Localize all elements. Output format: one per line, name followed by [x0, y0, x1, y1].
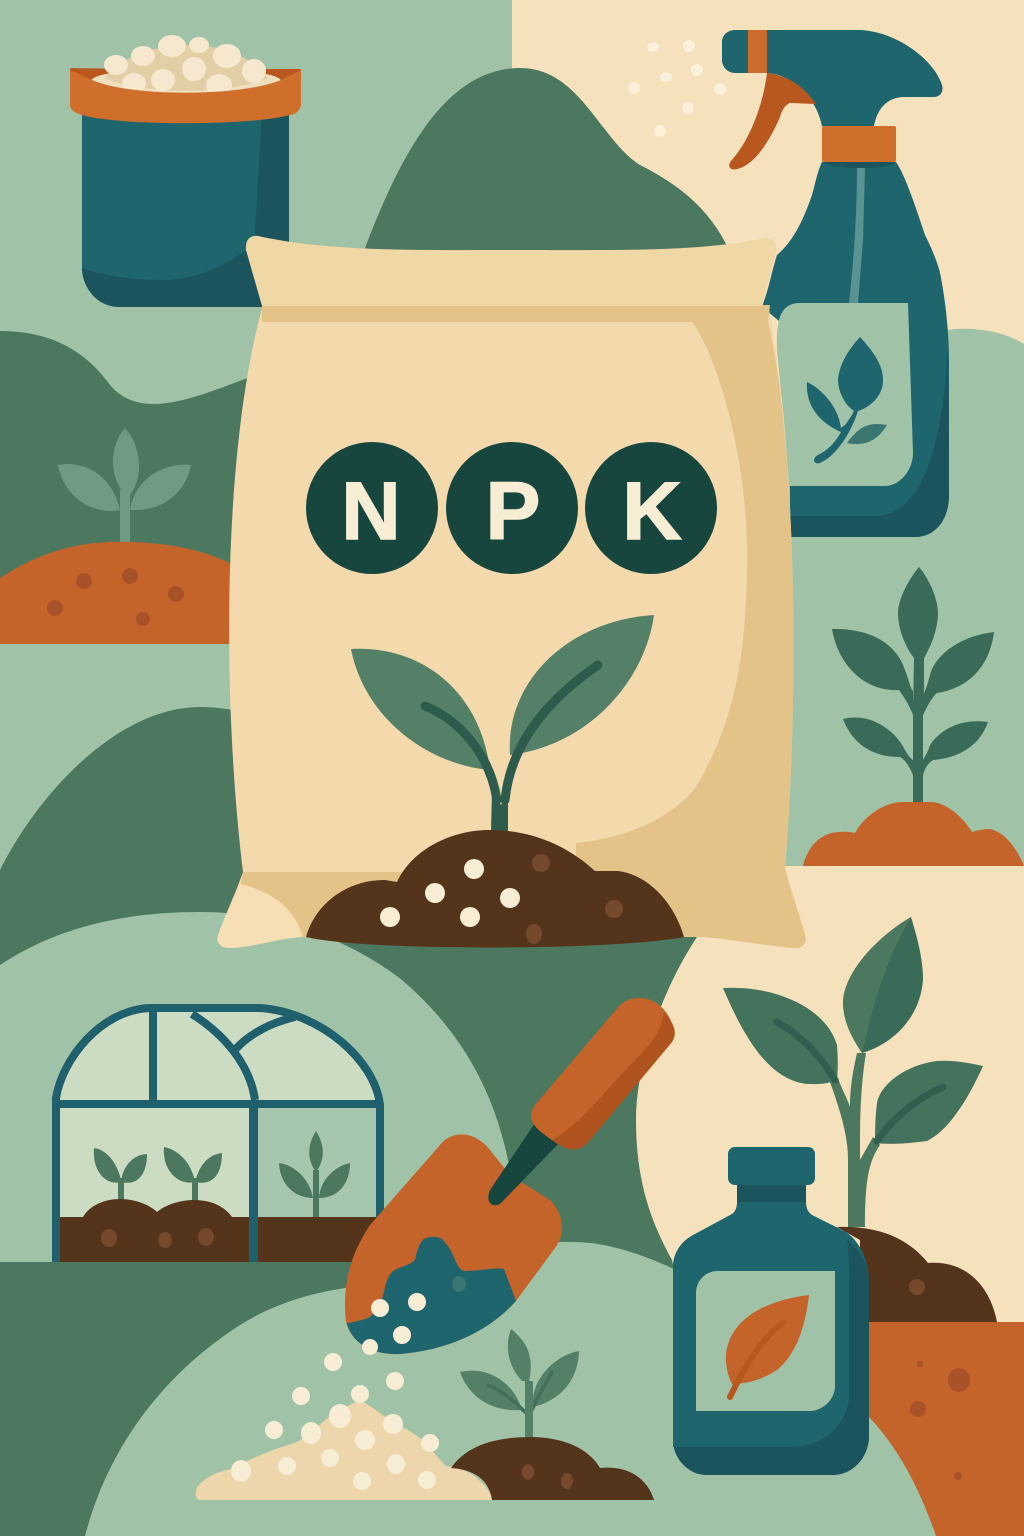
NPK badges: K [622, 466, 682, 557]
NPK badges [306, 442, 717, 574]
icon: granule pile [196, 1353, 493, 1500]
icon: central seedling [351, 615, 654, 832]
icon: soil mound with granules [306, 830, 684, 948]
icon: dots spray mist [628, 40, 726, 137]
icon: pot of granules [70, 35, 301, 307]
icon: tall seedling right [723, 917, 997, 1322]
icon: small seedling on soil [451, 1329, 654, 1500]
icon: liquid fertilizer bottle [673, 1147, 869, 1475]
NPK badges: P [486, 466, 540, 557]
icon: right seedling on orange mound [803, 567, 1024, 866]
icon: greenhouse [56, 1008, 380, 1262]
NPK badges: N [341, 466, 401, 557]
icon: spray bottle [722, 30, 949, 537]
icon: trowel with granules [345, 998, 675, 1355]
icon: left seedling on orange soil [0, 428, 236, 644]
panel: fertilizer sack [217, 236, 806, 948]
